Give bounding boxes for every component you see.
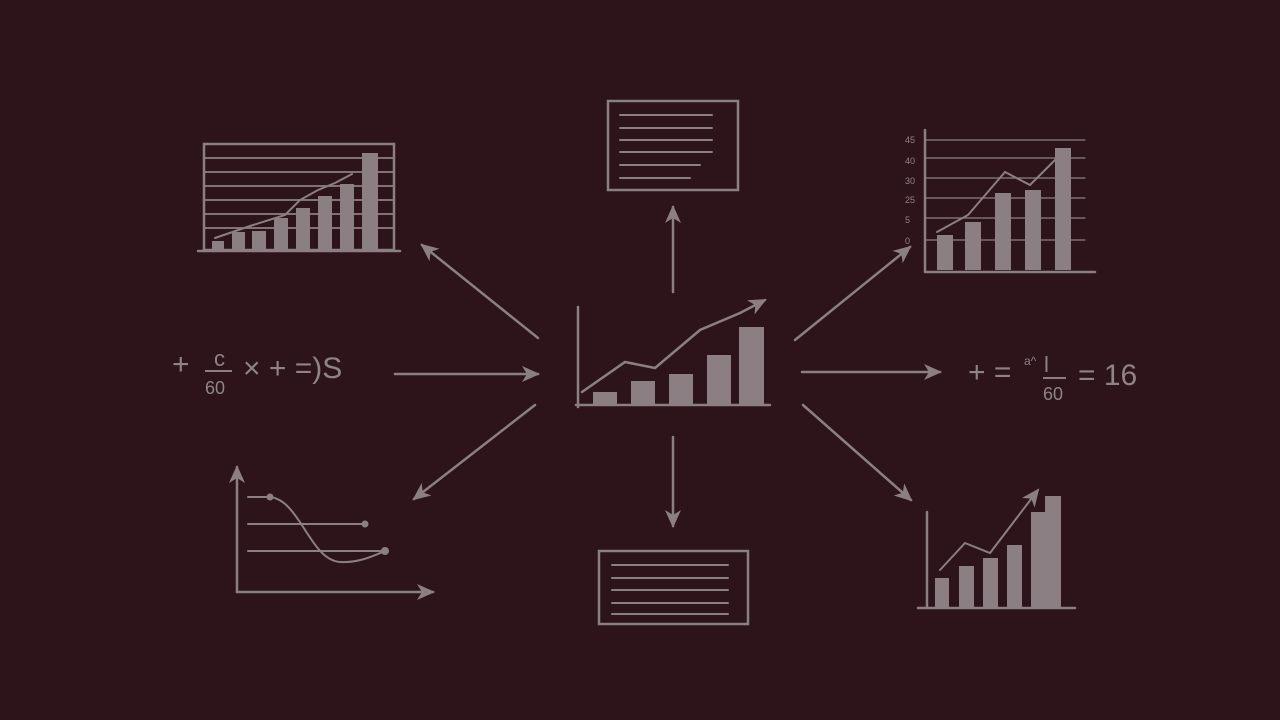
text: top-right chart axis labels bbox=[905, 135, 915, 246]
chart: bottom-left line chart bbox=[237, 467, 433, 592]
arrow: right bbox=[802, 371, 940, 373]
arrow: lower-right bbox=[803, 405, 911, 500]
text: top-right chart axis labels: 30 bbox=[905, 176, 915, 186]
formula: right bbox=[968, 352, 1137, 404]
document: bottom bbox=[599, 551, 748, 624]
formula: left bbox=[172, 346, 342, 398]
formula: left: + bbox=[172, 348, 190, 381]
document: top bbox=[608, 101, 738, 190]
arrow: from left formula bbox=[395, 373, 538, 375]
text: top-right chart axis labels: 0 bbox=[905, 236, 910, 246]
text: top-right chart axis labels: 40 bbox=[905, 156, 915, 166]
chart: top-left bar chart bbox=[198, 144, 400, 251]
arrow: down bbox=[672, 437, 674, 526]
arrows from center bbox=[395, 207, 940, 526]
arrow: lower-left bbox=[414, 405, 535, 499]
arrow: upper-right bbox=[795, 247, 910, 340]
formula: left: c bbox=[214, 346, 225, 371]
text: top-right chart axis labels: 5 bbox=[905, 215, 910, 225]
formula: right: l bbox=[1044, 352, 1049, 377]
text: top-right chart axis labels: 45 bbox=[905, 135, 915, 145]
formula: right: a^ bbox=[1024, 354, 1037, 368]
arrow: up bbox=[672, 207, 674, 292]
chart: bottom-right bar chart bbox=[918, 490, 1075, 608]
formula: left: 60 bbox=[205, 378, 225, 398]
text: top-right chart axis labels: 25 bbox=[905, 195, 915, 205]
chart: center rising bar chart bbox=[576, 300, 770, 407]
chart: top-right bar chart bbox=[925, 130, 1095, 272]
formula: right: 60 bbox=[1043, 384, 1063, 404]
formula: right: = 16 bbox=[1078, 359, 1137, 392]
arrow: upper-left bbox=[422, 245, 538, 338]
formula: left: × + =)S bbox=[243, 352, 342, 385]
formula: right: + = bbox=[968, 356, 1011, 389]
